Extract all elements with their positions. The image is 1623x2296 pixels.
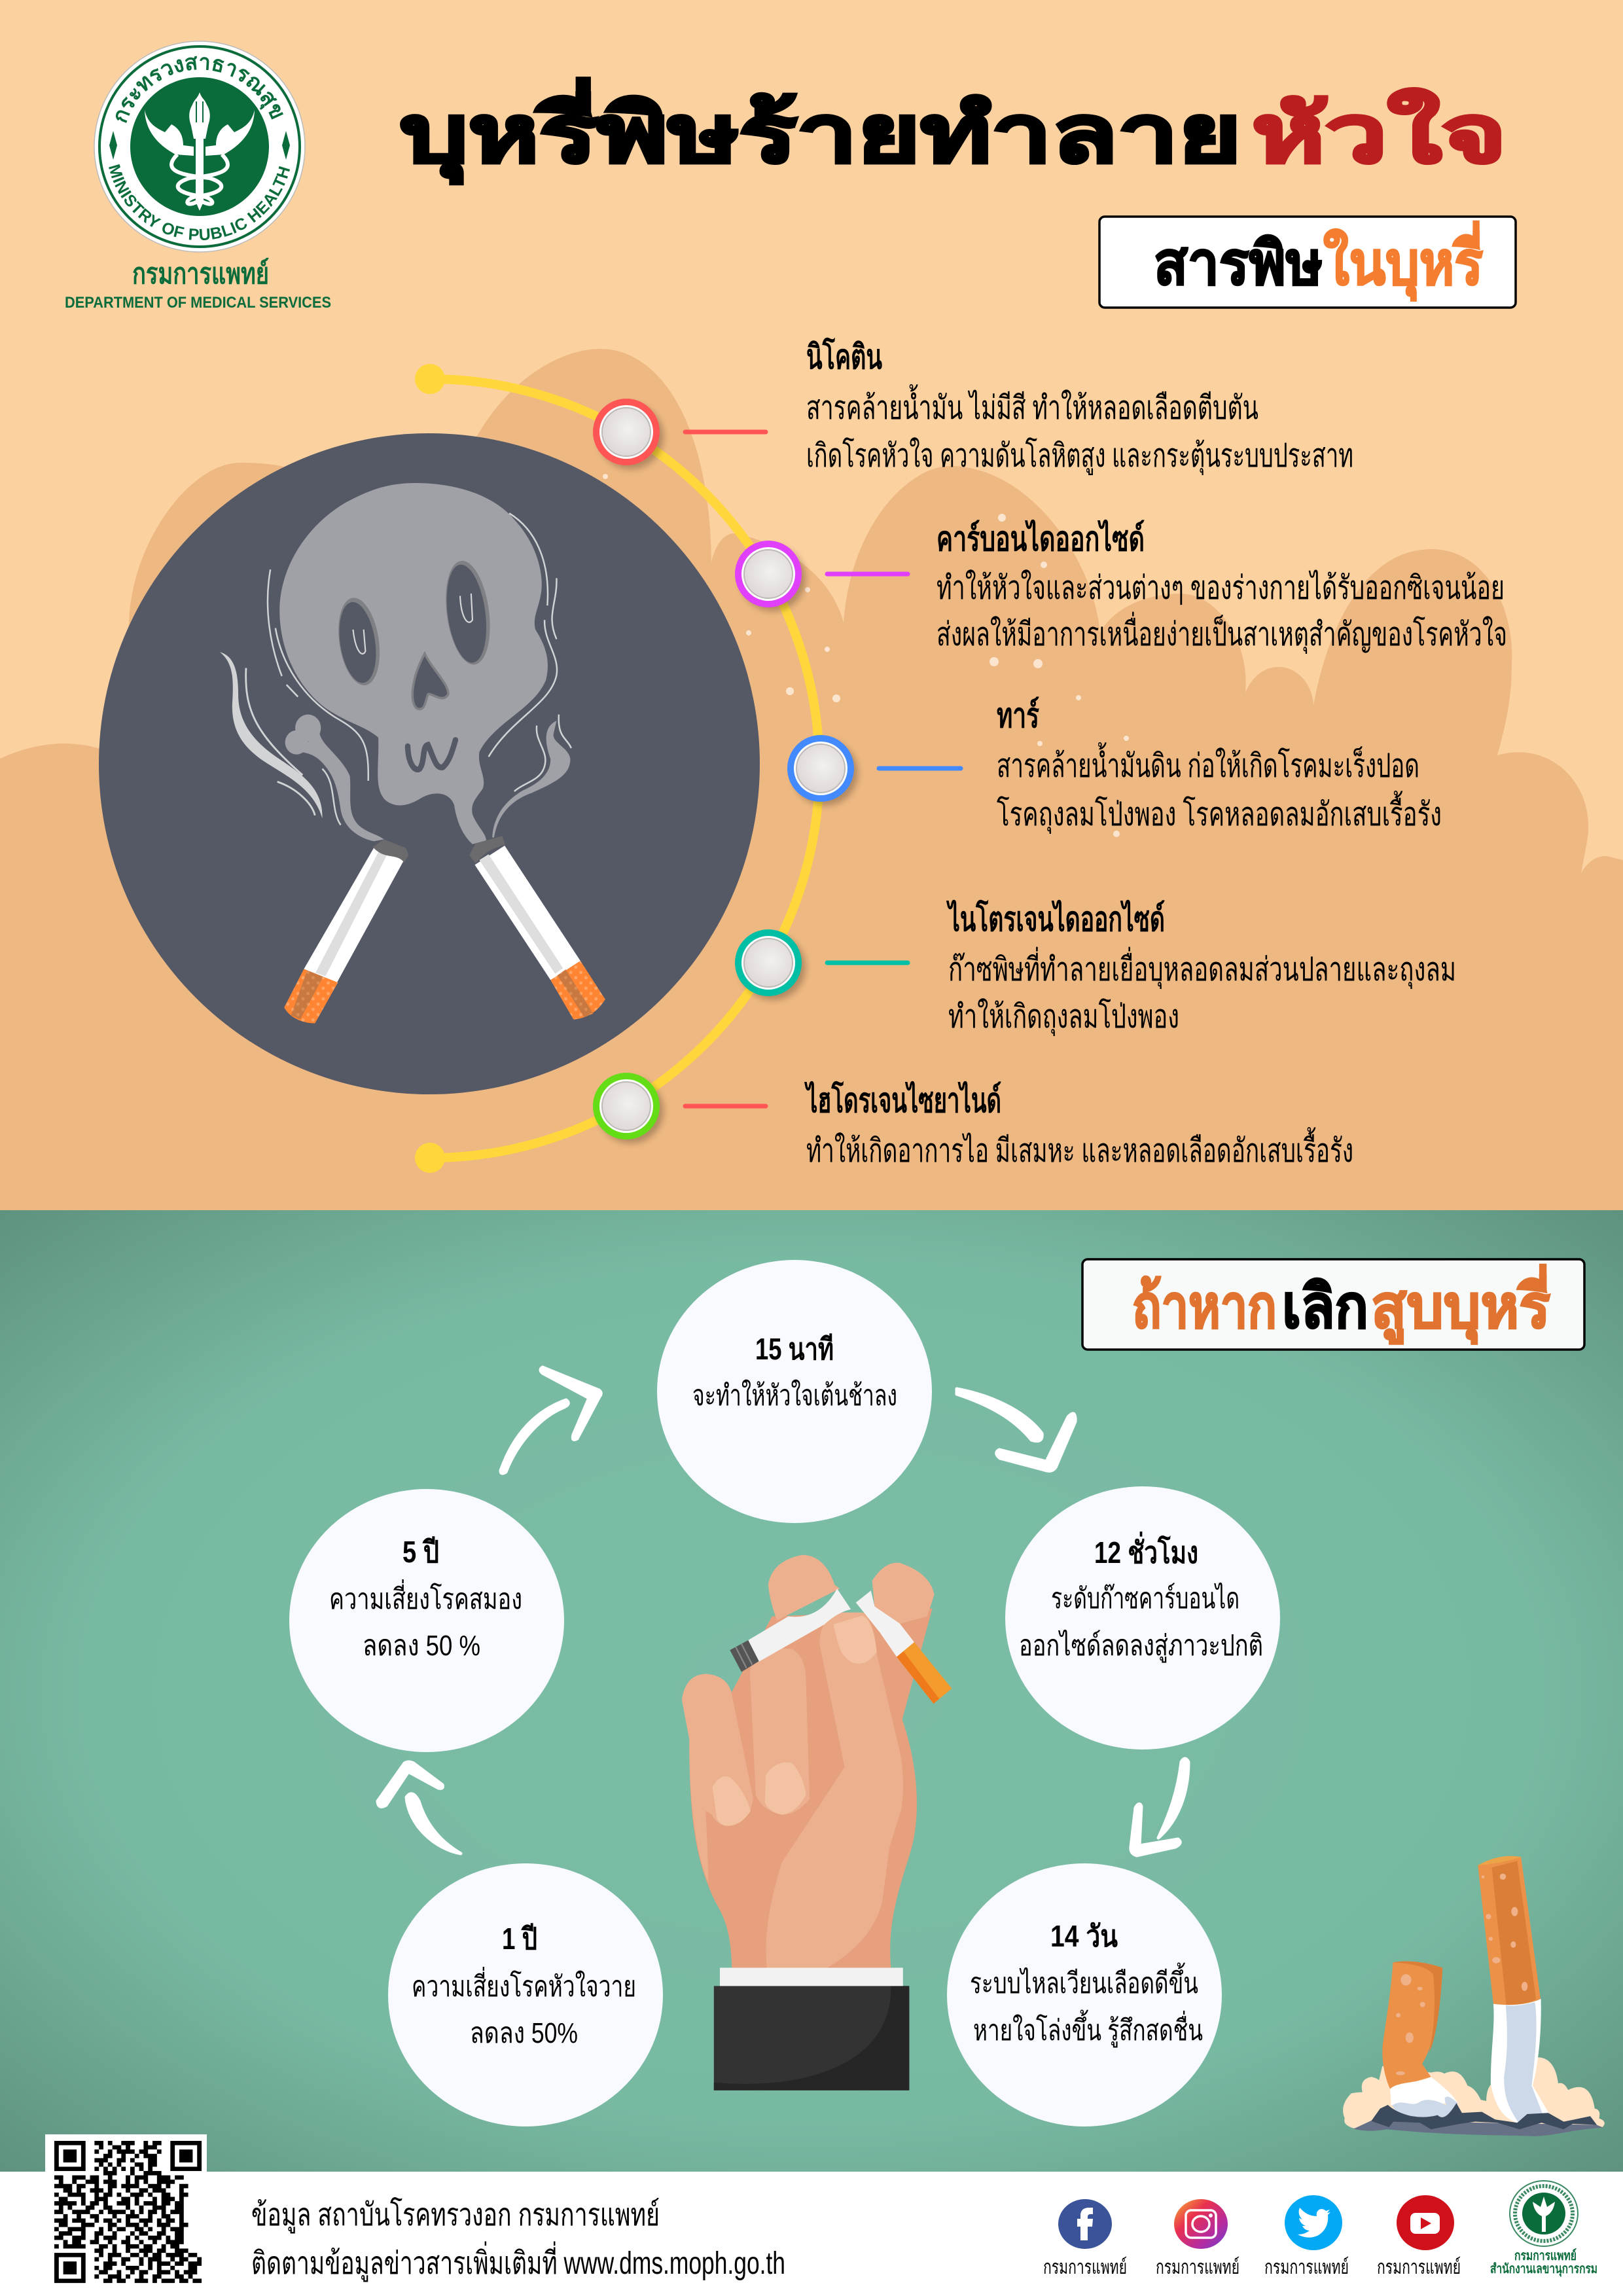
logo: Ministry of Public Health [94, 41, 306, 253]
circle: 12 hours: ระดับก๊าซคาร์บอนได [1051, 1582, 1240, 1615]
title: หัวใจ [1252, 88, 1507, 179]
illustration: smoke skull and cigarettes [220, 483, 605, 1023]
text: nitrogen dioxide: ก๊าซพิษที่ทำลายเยื่อบุหลอดลมส่วนปลายและถุงลม [948, 947, 1456, 989]
icon: twitter [1285, 2195, 1342, 2250]
heading box: if you quit smoking: ถ้าหาก [1132, 1274, 1277, 1340]
timeline arc [415, 364, 819, 1173]
text: nicotine: นิโคติน [806, 336, 882, 376]
arrow: top to right [957, 1389, 1075, 1471]
circle: 14 days: หายใจโล่งขึ้น รู้สึกสดชื่น [973, 2009, 1203, 2048]
bone and left smoke [285, 715, 384, 841]
circle: 14 days: ระบบไหลเวียนเลือดดีขึ้น [970, 1962, 1198, 2000]
footer background [0, 2172, 1623, 2296]
ash cloud [1343, 2057, 1605, 2128]
right smoke [492, 721, 570, 838]
circle: 1 year: 1 ปี [502, 1922, 537, 1956]
heading box: if you quit smoking: เลิก [1282, 1274, 1368, 1340]
circle: 5 years: ลดลง 50 % [363, 1630, 480, 1662]
connector lines [685, 432, 961, 1106]
text: carbon monoxide: คาร์บอนไดออกไซด์ [936, 519, 1145, 558]
text: nitrogen dioxide [946, 899, 1456, 1036]
heading box: if you quit smoking: สูบบุหรี่ [1371, 1264, 1550, 1344]
broken cigarette right [856, 1590, 952, 1704]
circle: 1 year [388, 1863, 663, 2126]
footer source text [251, 2197, 785, 2282]
text: nicotine: เกิดโรคหัวใจ ความดันโลหิตสูง และกระตุ้นระบบประสาท [806, 437, 1353, 475]
footer source text: ข้อมูล สถาบันโรคทรวงอก กรมการแพทย์ [251, 2197, 660, 2234]
icon: facebook [1058, 2199, 1112, 2249]
icon: small ministry logo [1510, 2181, 1578, 2246]
circle: 1 year: ความเสี่ยงโรคหัวใจวาย [412, 1966, 636, 2003]
icon: instagram [1174, 2199, 1228, 2249]
mouth [408, 740, 455, 770]
cuff [720, 1967, 903, 1986]
circle: 5 years [289, 1489, 564, 1752]
circle: 14 days: 14 วัน [1050, 1919, 1118, 1953]
broken cigarette left [730, 1588, 851, 1672]
nose [412, 654, 448, 709]
arrow: left to top [501, 1367, 601, 1473]
right cigarette [469, 836, 605, 1020]
text: tar [997, 696, 1442, 834]
arrow: right to bottom [1131, 1759, 1188, 1856]
caption: small logo: กรมการแพทย์ [1514, 2248, 1577, 2263]
heading box: if you quit smoking [1082, 1259, 1584, 1350]
fingers [682, 1555, 935, 1967]
label: youtube: กรมการแพทย์ [1377, 2256, 1461, 2278]
tall butt [1478, 1856, 1549, 2123]
palm [689, 1609, 933, 1967]
text: nitrogen dioxide: ทำให้เกิดถุงลมโป่งพอง [948, 998, 1179, 1036]
heading box: toxins in cigarettes: สารพิษ [1154, 230, 1323, 297]
speckle dots [603, 474, 1129, 837]
illustration: stubbed cigarette butts [1343, 1856, 1605, 2136]
ornaments [109, 131, 290, 160]
background hills [0, 349, 1623, 1211]
text: hydrogen cyanide: ไฮโดรเจนไซยาไนด์ [804, 1080, 1001, 1120]
logo: Ministry of Public Health: กระทรวงสาธารณสุข [115, 56, 283, 123]
label: twitter: กรมการแพทย์ [1264, 2256, 1349, 2278]
bottom section background [0, 1210, 1623, 2172]
short butt [1382, 1962, 1457, 2121]
text: tar: สารคล้ายน้ำมันดิน ก่อให้เกิดโรคมะเร็งปอด [997, 742, 1419, 784]
icon: caduceus emblem [145, 92, 255, 211]
eyes [333, 558, 496, 689]
node 3 [787, 735, 858, 806]
dark circle panel [99, 433, 760, 1094]
logo: Ministry of Public Health: MINISTRY OF PUBLIC HEALTH [109, 164, 290, 240]
top section background [0, 0, 1623, 1211]
circle: 1 year: ลดลง 50% [470, 2017, 578, 2049]
nails [713, 1615, 877, 1826]
circle: 15 minutes [657, 1260, 932, 1523]
heading box: toxins in cigarettes [1099, 217, 1516, 308]
node 1 [593, 399, 664, 469]
text: tar: โรคถุงลมโป่งพอง โรคหลอดลมอักเสบเรื้อรัง [997, 791, 1442, 834]
icon: youtube [1397, 2195, 1454, 2250]
smoke skull [279, 483, 548, 844]
title [400, 78, 1507, 184]
circle: 12 hours [1005, 1486, 1280, 1749]
circle: 5 years: ความเสี่ยงโรคสมอง [329, 1579, 522, 1615]
footer source text: ติดตามข้อมูลข่าวสารเพิ่มเติมที่ www.dms.moph.go.th [251, 2241, 785, 2282]
circle: 14 days [947, 1863, 1222, 2126]
label: facebook: กรมการแพทย์ [1043, 2256, 1127, 2278]
illustration: hand breaking cigarette [682, 1555, 952, 2090]
smoke wisps [220, 513, 571, 825]
sleeve [714, 1986, 909, 2090]
arrow: bottom to left [378, 1762, 461, 1854]
circle: 12 hours: ออกไซด์ลดลงสู่ภาวะปกติ [1019, 1629, 1263, 1663]
text: tar: ทาร์ [997, 696, 1039, 735]
circle: 12 hours: 12 ชั่วโมง [1094, 1532, 1198, 1570]
caption: small logo [1490, 2248, 1597, 2277]
circle: 15 minutes: 15 นาที [755, 1332, 834, 1366]
ash pile [1353, 2121, 1603, 2136]
text: nitrogen dioxide: ไนโตรเจนไดออกไซด์ [946, 899, 1165, 939]
label: instagram: กรมการแพทย์ [1156, 2256, 1240, 2278]
title: บุหรี่พิษร้ายทำลาย [400, 78, 1241, 184]
heading box: toxins in cigarettes: ในบุหรี่ [1323, 221, 1483, 301]
text: nicotine [806, 336, 1353, 475]
left cigarette [284, 839, 408, 1023]
department name Thai: กรมการแพทย์ [132, 257, 269, 290]
department name English: DEPARTMENT OF MEDICAL SERVICES [65, 294, 331, 312]
node 4 [735, 929, 806, 1000]
circle: 15 minutes: จะทำให้หัวใจเต้นช้าลง [692, 1379, 897, 1412]
text: hydrogen cyanide [804, 1080, 1353, 1169]
node 5 [593, 1073, 664, 1143]
QR code [45, 2134, 207, 2286]
node 2 [735, 541, 806, 611]
circle: 5 years: 5 ปี [402, 1535, 439, 1569]
text: nicotine: สารคล้ายน้ำมัน ไม่มีสี ทำให้หลอดเลือดตีบตัน [806, 384, 1258, 426]
text: carbon monoxide [936, 519, 1507, 654]
text: hydrogen cyanide: ทำให้เกิดอาการไอ มีเสมหะ และหลอดเลือดอักเสบเรื้อรัง [806, 1127, 1353, 1169]
